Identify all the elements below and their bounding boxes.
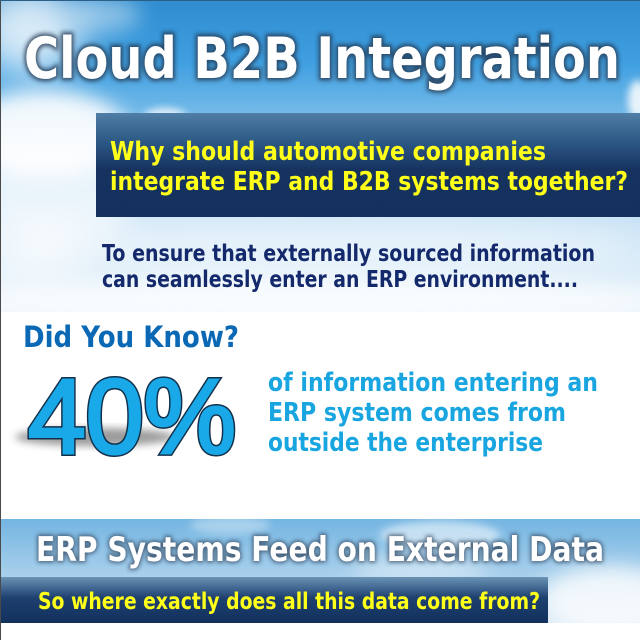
statistic description: outside the enterprise: [268, 428, 543, 458]
statistic: 40%: 40%: [28, 358, 236, 476]
sky background with clouds: [0, 0, 640, 322]
statistic: 40%: 40%: [28, 358, 236, 476]
banner question bar: [0, 577, 548, 623]
question panel: [96, 113, 640, 217]
lower banner: [1, 519, 640, 623]
white content panel background: [0, 312, 640, 519]
statistic description: ERP system comes from: [268, 398, 566, 428]
banner question text: So where exactly does all this data come from?: [38, 589, 540, 615]
question text: Why should automotive companies: [110, 137, 546, 167]
did you know heading: Did You Know?: [23, 320, 239, 354]
